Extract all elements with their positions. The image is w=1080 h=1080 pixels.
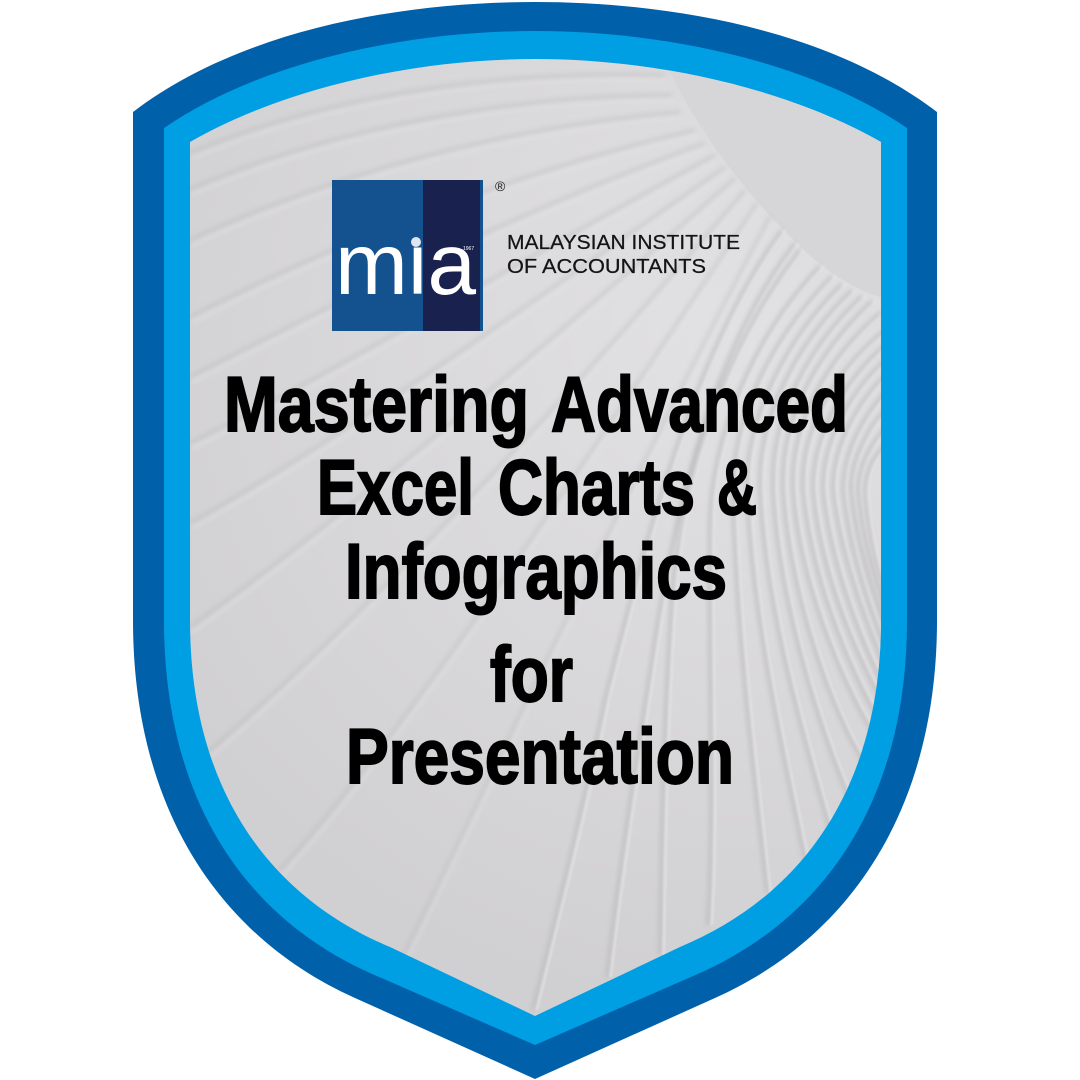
title line 2: Excel bbox=[317, 443, 474, 531]
institute name: OF ACCOUNTANTS bbox=[507, 255, 706, 278]
logo square: navy band bbox=[423, 180, 480, 331]
title line 2: & bbox=[717, 443, 757, 531]
title bbox=[224, 360, 848, 800]
institute name: MALAYSIAN INSTITUTE bbox=[507, 231, 740, 254]
title line 1: Advanced bbox=[551, 360, 848, 448]
title line 5: Presentation bbox=[346, 712, 734, 800]
logo year: 1967 bbox=[463, 246, 474, 252]
logo square: blue bbox=[332, 180, 483, 331]
shield badge bbox=[133, 2, 937, 1079]
shield outer border bbox=[133, 2, 937, 1079]
MIA logo bbox=[332, 178, 746, 331]
logo i dot adjustment bbox=[407, 226, 423, 247]
shield middle border bbox=[164, 31, 907, 1045]
logo letters: mia bbox=[335, 216, 477, 313]
shield inner panel with fan background bbox=[180, 50, 900, 1030]
title line 2: Charts bbox=[498, 443, 695, 531]
title line 3: Infographics bbox=[345, 527, 727, 615]
registered mark: ® bbox=[495, 178, 506, 194]
title line 1: Mastering bbox=[224, 360, 529, 448]
title line 4: for bbox=[490, 630, 573, 718]
